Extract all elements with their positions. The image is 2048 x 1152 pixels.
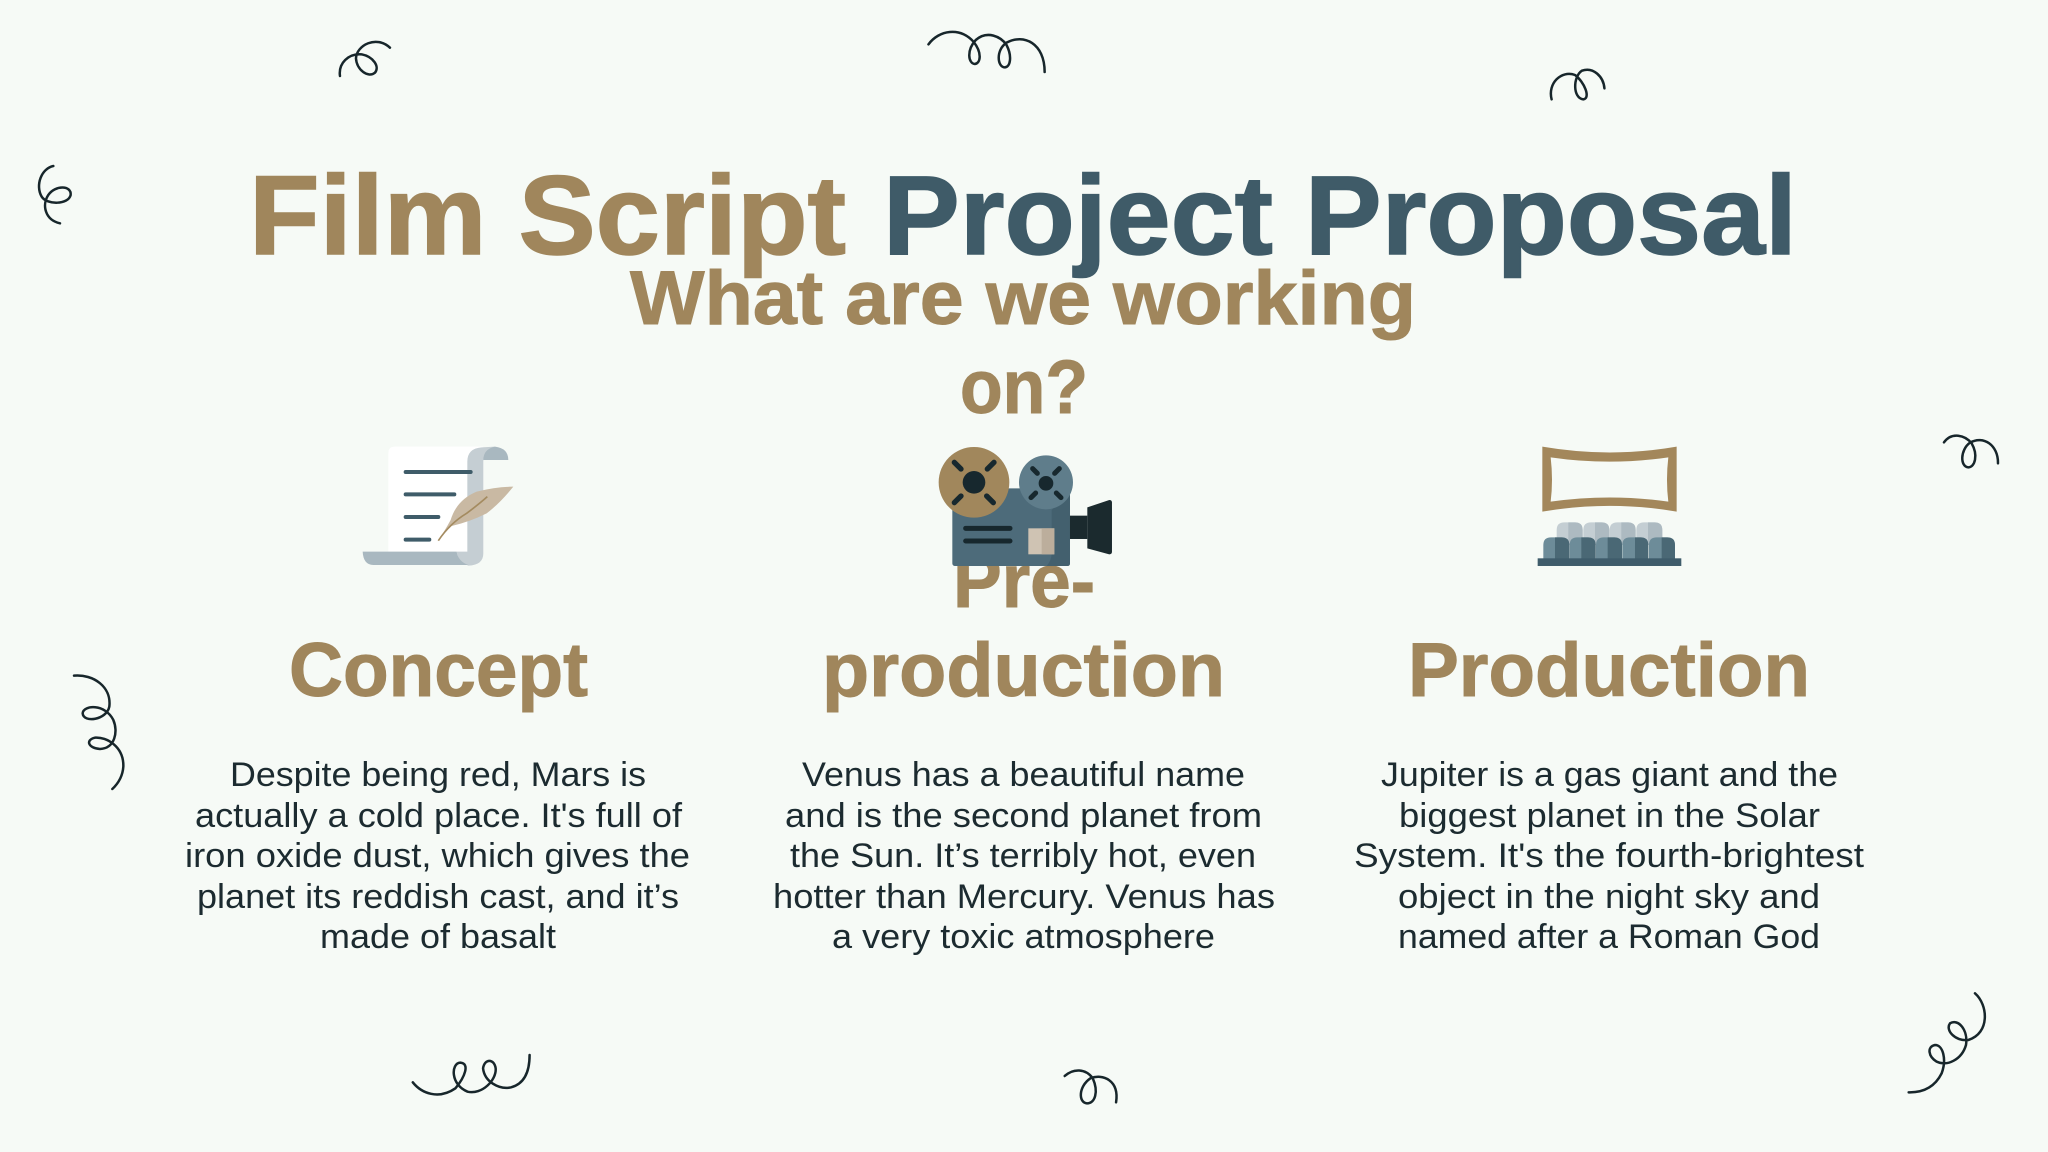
heading: pre-production [822, 539, 1225, 713]
text: pre-production description: hotter than Mercury. Venus has [773, 878, 1275, 916]
squiggle: far left upper [39, 166, 71, 223]
text: pre-production description: a very toxic atmosphere [832, 918, 1215, 956]
text: concept description: iron oxide dust, which gives the [185, 837, 690, 875]
subtitle: on? [960, 345, 1088, 430]
title: Project Proposal [883, 153, 1797, 278]
text: production description: Jupiter is a gas giant and the [1381, 756, 1838, 794]
text: pre-production description: and is the second planet from [785, 797, 1262, 835]
heading: concept: Concept [289, 628, 588, 713]
text: concept description: Despite being red, Mars is [230, 756, 646, 794]
subtitle [630, 256, 1416, 430]
squiggle: top left [340, 42, 390, 76]
title [249, 153, 1797, 278]
squiggle: far left tall [74, 676, 123, 789]
squiggle: bottom centre [1065, 1071, 1117, 1103]
squiggle: far right [1944, 436, 1998, 467]
heading: pre-production: production [822, 628, 1225, 713]
icon: script and quill [363, 447, 513, 566]
text: pre-production description: the Sun. It’s terribly hot, even [790, 837, 1256, 875]
title: Film Script [249, 153, 846, 278]
text: concept description [185, 756, 690, 956]
squiggle: top centre [928, 32, 1045, 72]
text: pre-production description: Venus has a beautiful name [802, 756, 1245, 794]
text: production description: System. It's the fourth-brightest [1354, 837, 1865, 875]
text: production description: object in the night sky and [1398, 878, 1820, 916]
panel: pre-production [773, 447, 1275, 956]
text: pre-production description [773, 756, 1275, 956]
icon: cinema screen and seats [1538, 447, 1681, 566]
squiggle: bottom left [413, 1055, 530, 1094]
subtitle: What are we working [630, 256, 1416, 341]
heading: pre-production: Pre- [953, 539, 1095, 624]
panel: production [1354, 447, 1865, 956]
heading: production: Production [1408, 628, 1810, 713]
text: concept description: actually a cold place. It's full of [195, 797, 683, 835]
squiggle: top right [1551, 70, 1604, 99]
text: production description [1354, 756, 1865, 956]
panel: concept [185, 447, 690, 956]
text: production description: biggest planet in the Solar [1399, 797, 1820, 835]
text: production description: named after a Roman God [1398, 918, 1820, 956]
icon: film camera [939, 447, 1112, 566]
squiggle: bottom right [1909, 993, 1985, 1092]
text: concept description: made of basalt [320, 918, 557, 956]
text: concept description: planet its reddish cast, and it’s [197, 878, 679, 916]
